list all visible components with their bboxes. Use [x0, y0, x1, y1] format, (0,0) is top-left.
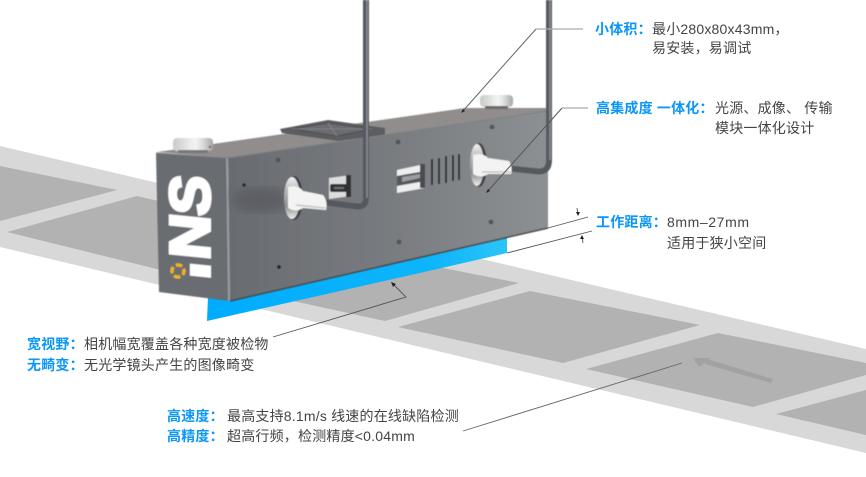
- label: high precision: 高精度：: [167, 428, 224, 444]
- leader: field of view: [273, 282, 406, 337]
- blue light beam: [207, 236, 507, 321]
- label: small size: 小体积：: [595, 21, 652, 37]
- text: narrow spaces: 适用于狭小空间: [667, 235, 766, 251]
- callout: field of view: [27, 336, 269, 373]
- label: no distortion: 无畸变：: [27, 357, 84, 373]
- fan plate: [280, 120, 385, 141]
- label: high speed: 高速度：: [167, 408, 224, 424]
- screws: [242, 125, 494, 269]
- port shadow: [232, 188, 292, 212]
- callout: small size: [595, 21, 789, 56]
- label: working distance: 工作距离：: [596, 214, 667, 230]
- text: modules: 光源、成像、 传输: [715, 100, 833, 116]
- callout: integration: [596, 100, 833, 136]
- leader: speed: [463, 363, 682, 431]
- connector left: [284, 176, 327, 220]
- connector right: [470, 143, 512, 187]
- side face: [228, 111, 548, 301]
- text: integrated design: 模块一体化设计: [715, 120, 814, 136]
- logo: S: [159, 172, 222, 218]
- knob left: [173, 138, 213, 153]
- text: high speed: 最高支持8.1m/s 线速的在线缺陷检测: [227, 408, 459, 424]
- end face: [156, 153, 229, 301]
- knob right: [480, 95, 513, 109]
- logo: ı: [175, 256, 220, 285]
- leader: integration: [486, 108, 588, 193]
- camera body: [156, 0, 550, 301]
- cable left: [322, 0, 367, 207]
- usb port: [329, 175, 351, 199]
- leader: small size: [461, 29, 583, 113]
- leader: working distance: [507, 208, 592, 253]
- text: no distortion: 无光学镜头产生的图像畸变: [84, 357, 254, 373]
- label: wide field: 宽视野：: [27, 336, 84, 352]
- label: integration: 高集成度 一体化：: [596, 100, 714, 116]
- direction arrow: [693, 358, 773, 383]
- text: high precision: 超高行频，检测精度<0.04mm: [227, 428, 415, 444]
- callout: working distance: [596, 214, 766, 251]
- logo: N: [158, 211, 222, 262]
- cable right: [505, 0, 550, 172]
- belt tiles: [0, 166, 866, 435]
- logo: [158, 172, 222, 285]
- text: dimensions: 最小280x80x43mm，: [652, 21, 789, 37]
- text: wide field: 相机幅宽覆盖各种宽度被检物: [84, 336, 269, 352]
- vent slots: [432, 154, 459, 185]
- text: easy install: 易安装，易调试: [652, 40, 751, 56]
- text: distance range: 8mm–27mm: [667, 214, 750, 230]
- top face: [157, 108, 548, 158]
- data port: [397, 164, 425, 193]
- callout: speed and precision: [167, 408, 459, 444]
- conveyor belt: [0, 146, 866, 453]
